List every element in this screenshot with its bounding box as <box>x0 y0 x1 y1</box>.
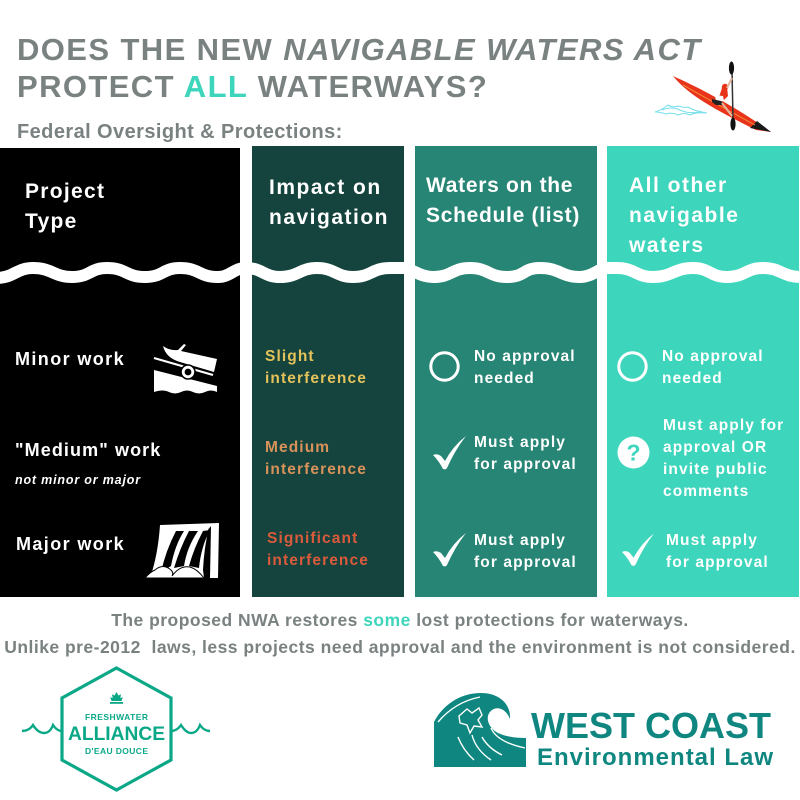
icon: check <box>433 533 466 566</box>
rating: significant: interference <box>267 552 369 569</box>
icon: boat ramp <box>154 344 217 394</box>
logo: west coast environmental law: WEST COAST <box>531 705 771 746</box>
status: no approval <box>474 348 576 387</box>
title: PROTECT ALL WATERWAYS? <box>17 68 488 104</box>
logo: freshwater alliance: FRESHWATER <box>85 712 148 722</box>
logo: freshwater alliance: D'EAU DOUCE <box>85 746 148 756</box>
row note: not minor or major <box>15 473 141 487</box>
logo: west coast environmental law <box>434 693 774 770</box>
icon: check <box>622 534 654 566</box>
status: must apply or comments: invite public <box>663 461 768 478</box>
status: must apply: Must apply <box>474 434 566 451</box>
column heading: Waters on the <box>426 174 573 197</box>
icon: empty circle <box>617 351 648 382</box>
logo: freshwater alliance <box>22 666 210 792</box>
rating: slight <box>265 348 367 387</box>
status: no approval <box>662 348 764 387</box>
column heading: Project <box>25 180 105 203</box>
column heading: Impact on <box>269 176 382 199</box>
footer text <box>4 610 796 657</box>
status: must apply <box>474 532 577 571</box>
rating: significant: Significant <box>267 530 358 547</box>
column heading: Schedule (list) <box>426 204 580 227</box>
column heading: All other <box>629 174 728 197</box>
footer text: The proposed NWA restores some lost protections for waterways. <box>111 610 689 630</box>
icon: kayaker <box>654 62 771 132</box>
title <box>17 32 702 104</box>
logo: freshwater alliance: ALLIANCE <box>68 723 165 745</box>
status: no approval: No approval <box>474 348 576 365</box>
status: no approval: needed <box>474 370 535 387</box>
column heading <box>269 176 389 229</box>
rating: medium: Medium <box>265 439 330 456</box>
footer text: Unlike pre-2012 laws, less projects need approval and the environment is not considered. <box>4 637 796 657</box>
rating: slight: interference <box>265 370 367 387</box>
panel: impact on navigation <box>252 148 404 597</box>
status: must apply: for approval <box>474 456 577 473</box>
status: must apply or comments: comments <box>663 483 749 500</box>
panel: all other navigable waters <box>607 148 799 597</box>
icon: question mark <box>618 436 650 468</box>
icon: dam <box>146 523 219 578</box>
rating: medium <box>265 439 367 478</box>
column heading <box>628 174 739 257</box>
column heading <box>25 180 105 233</box>
column heading <box>426 174 580 227</box>
row label: medium work: "Medium" work <box>15 440 161 460</box>
subheading: Federal Oversight & Protections: <box>17 121 343 143</box>
row label: major work: Major work <box>16 534 125 554</box>
icon: check <box>433 436 466 470</box>
status: must apply or comments <box>663 417 784 500</box>
column heading: navigation <box>269 206 389 229</box>
panel: waters on the schedule <box>415 148 597 597</box>
status: no approval: No approval <box>662 348 764 365</box>
status: must apply <box>474 434 577 473</box>
status: must apply: Must apply <box>474 532 566 549</box>
panel: project type <box>0 148 240 597</box>
status: must apply <box>666 532 769 571</box>
title: DOES THE NEW NAVIGABLE WATERS ACT <box>17 32 702 67</box>
row label: minor work: Minor work <box>15 349 125 369</box>
wave divider <box>0 262 799 284</box>
status: must apply: for approval <box>666 554 769 571</box>
icon: empty circle <box>429 351 460 382</box>
status: must apply or comments: Must apply for <box>663 417 784 434</box>
status: no approval: needed <box>662 370 723 387</box>
rating: slight: Slight <box>265 348 315 365</box>
status: must apply or comments: approval OR <box>663 439 767 456</box>
status: must apply: Must apply <box>666 532 758 549</box>
status: must apply: for approval <box>474 554 577 571</box>
column heading: navigable <box>629 204 739 227</box>
rating: significant <box>267 530 369 569</box>
icon: question mark: ? <box>626 440 641 466</box>
column heading: Type <box>25 210 78 233</box>
rating: medium: interference <box>265 461 367 478</box>
column heading: waters <box>629 234 705 257</box>
